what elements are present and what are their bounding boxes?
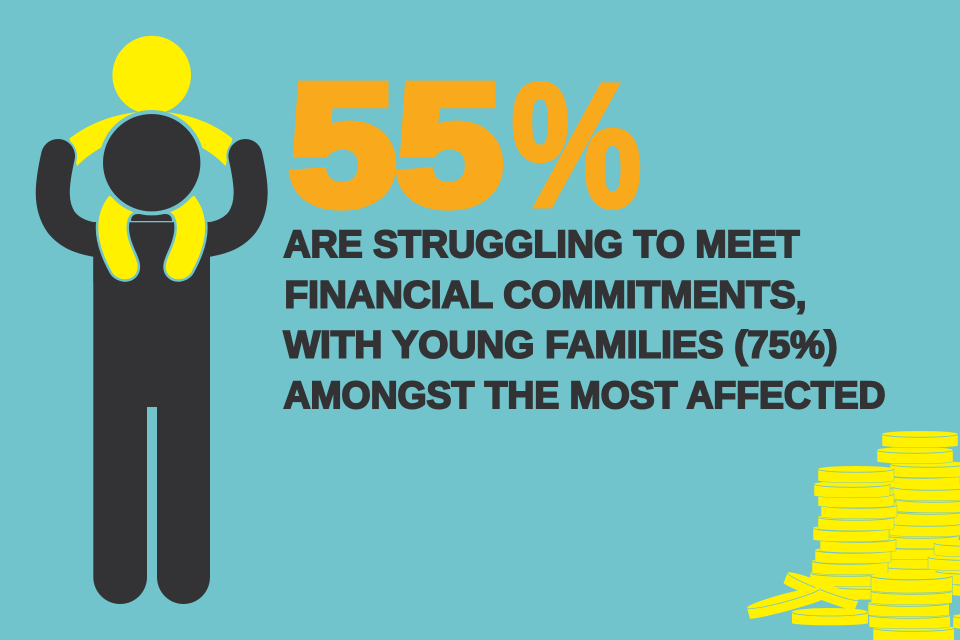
statement text: FINANCIAL COMMITMENTS, [284,274,806,316]
middle coin stack [810,466,906,600]
front coin stack [868,572,954,640]
child left leg [97,194,139,280]
big statistic 55% [289,48,642,244]
parent right arm [199,156,251,241]
loose coins [746,569,868,625]
icon: parent carrying child on shoulders [53,36,251,604]
parent head [101,112,202,213]
parent left arm [53,156,104,241]
parent body and legs [93,222,210,604]
body cover below arms [93,222,210,282]
collar line [130,221,173,222]
statement text: ARE STRUGGLING TO MEET [284,224,800,266]
statement text: AMONGST THE MOST AFFECTED [284,375,886,417]
child arms [70,111,232,166]
right coin stack [928,540,960,630]
statement text: WITH YOUNG FAMILIES (75%) [284,324,838,366]
child right leg [165,194,206,280]
child head [112,36,191,114]
big statistic 55%: % [511,48,642,244]
back coin stack [877,431,960,580]
collar [131,214,172,221]
icon: coin stacks [746,431,960,640]
big statistic 55%: 55 [289,49,503,241]
statement text [284,224,886,417]
